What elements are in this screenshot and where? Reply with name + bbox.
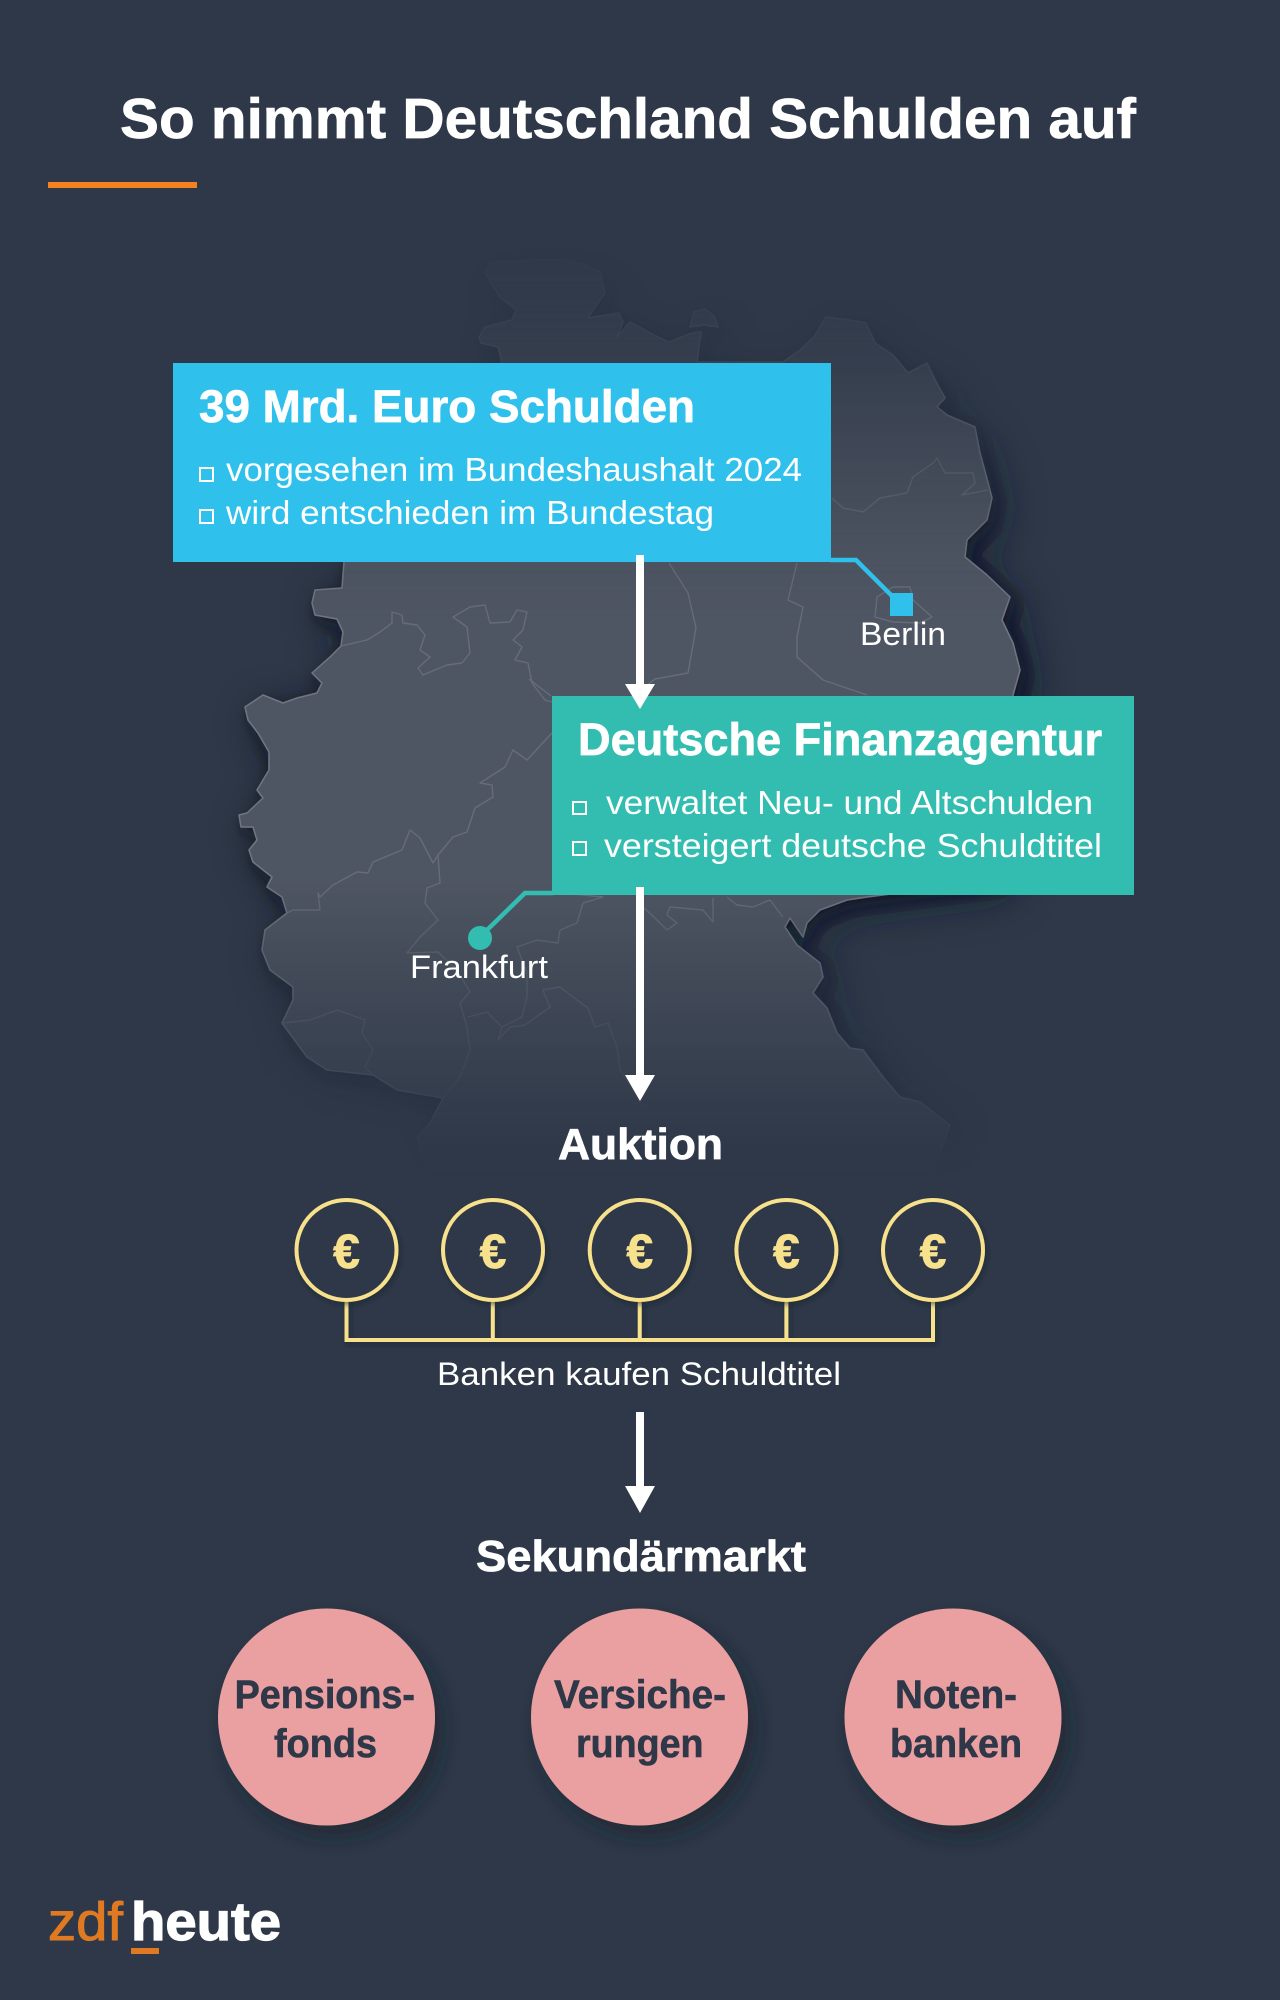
arrow: budget to Finanzagentur [625,555,655,709]
circle: Notenbanken: banken [890,1722,1022,1766]
coin 5: € [920,1226,946,1279]
coin 2: € [480,1226,506,1279]
heading: Auktion: Auktion [558,1120,723,1169]
circle: Versicherungen [531,1608,748,1826]
coin 3 [590,1200,690,1300]
bullet text: wird entschieden im Bundestag [225,494,714,531]
caption: Banken kaufen Schuldtitel: Banken kaufen Schuldtitel [437,1356,841,1392]
bullet [200,468,213,481]
circle: Notenbanken [844,1608,1062,1826]
circle: Pensionsfonds: fonds [274,1722,377,1766]
bullet [573,842,586,855]
bullet text: vorgesehen im Bundeshaushalt 2024 [226,451,802,488]
map: land silhouette [236,325,1046,1108]
callout connector: Frankfurt [485,893,553,932]
title: So nimmt Deutschland Schulden auf [120,87,1137,151]
circle: Pensionsfonds: Pensions- [235,1673,415,1717]
coin 2 [443,1200,543,1300]
circle: Versicherungen: rungen [576,1722,704,1766]
coin 4 [736,1200,836,1300]
circle: Versicherungen: Versiche- [554,1673,726,1717]
coin 1: € [333,1226,360,1279]
panel: Deutsche Finanzagentur [552,696,1134,895]
arrow: Finanzagentur to Auktion [625,887,655,1101]
bullet [200,510,213,523]
label: Frankfurt: Frankfurt [410,949,548,985]
logo: zdfheute: heute [131,1892,281,1952]
callout connector: Berlin [830,560,893,597]
title accent line [48,182,197,188]
logo: zdfheute: zdf [48,1892,124,1952]
logo: zdfheute [48,1892,281,1954]
map: state borders [282,458,988,1107]
coin 1 [296,1200,396,1300]
connector bracket [346,1302,933,1340]
coin 3: € [626,1226,653,1279]
bullet text: verwaltet Neu- und Altschulden [606,784,1093,821]
coin 5 [883,1200,983,1300]
map of Germany [236,325,1046,1108]
circle: Notenbanken: Noten- [895,1673,1017,1717]
coin 4: € [773,1226,800,1279]
label: Berlin: Berlin [860,616,946,652]
panel: 39 Mrd. Euro Schulden [173,363,831,562]
marker: Berlin square [890,593,913,616]
panel heading: 39 Mrd. Euro Schulden [199,381,695,432]
panel heading: Deutsche Finanzagentur [578,714,1102,765]
arrow: Auktion to Sekundärmarkt [625,1412,655,1513]
bullet text: versteigert deutsche Schuldtitel [604,827,1102,864]
marker: Frankfurt dot [468,926,492,950]
heading: Sekundärmarkt: Sekundärmarkt [476,1532,806,1581]
circle: Pensionsfonds [218,1608,435,1826]
auction diagram: euro coins and connector [296,1200,983,1340]
bullet [573,802,586,814]
